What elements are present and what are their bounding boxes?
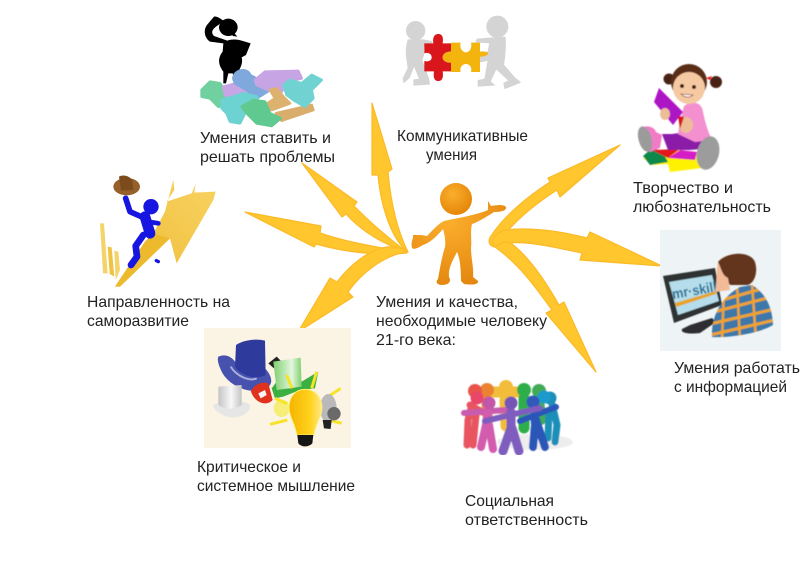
- arrow: to communication: [372, 103, 408, 252]
- label: information skills: [674, 360, 800, 396]
- label: critical thinking: Критическое и: [197, 459, 301, 476]
- label: self-development: Направленность на: [87, 294, 230, 311]
- arrow: to social responsibility: [495, 242, 596, 372]
- label: self-development: саморазвитие: [87, 313, 189, 330]
- panel: self-development: [87, 175, 230, 330]
- label: communication: [397, 128, 528, 164]
- icon: man at computer: [663, 254, 775, 340]
- background: man panel: [660, 230, 781, 351]
- label: creativity: Творчество и: [633, 180, 733, 197]
- label: communication: Коммуникативные: [397, 128, 528, 145]
- panel: social responsibility: [464, 380, 588, 529]
- label: social responsibility: ответственность: [465, 512, 588, 529]
- label: critical thinking: системное мышление: [197, 478, 355, 495]
- icon: man at computer: mr·skill: [671, 278, 718, 302]
- label: creativity: [633, 180, 771, 216]
- arrow: to problem solving: [302, 163, 407, 252]
- panel: problem solving: [200, 17, 335, 166]
- central caption: 21-го века:: [376, 332, 456, 349]
- central caption: Умения и качества,: [376, 294, 518, 311]
- arrow: to critical thinking: [298, 247, 407, 332]
- label: problem solving: решать проблемы: [200, 149, 335, 166]
- label: creativity: любознательность: [633, 199, 771, 216]
- central orange figure: [412, 183, 506, 285]
- panel: critical thinking: [197, 328, 355, 495]
- icon: climbing figure on arrow: [100, 175, 216, 287]
- background: hats panel: [204, 328, 351, 448]
- icon: circle of clay figures: [464, 380, 573, 451]
- central caption: необходимые человеку: [376, 313, 547, 330]
- icon: thinking hats and light bulb: [213, 340, 342, 446]
- icon: puzzled silhouette and puzzle pieces: [202, 17, 322, 126]
- icon: girl with paper: [635, 64, 723, 172]
- label: problem solving: Умения ставить и: [200, 130, 331, 147]
- panel: communication: [397, 16, 528, 164]
- central caption: [376, 294, 547, 349]
- label: communication: умения: [426, 147, 477, 164]
- label: critical thinking: [197, 459, 355, 495]
- label: information skills: Умения работать: [674, 360, 800, 377]
- panel: information skills: [660, 230, 800, 396]
- panel: creativity: [633, 64, 771, 216]
- arrow: to information skills: [492, 229, 662, 266]
- label: social responsibility: [465, 493, 588, 529]
- icon: two figures with puzzle: [403, 16, 520, 88]
- arrows radiating from central figure: [245, 103, 662, 372]
- label: problem solving: [200, 130, 335, 166]
- label: social responsibility: Социальная: [465, 493, 554, 510]
- label: information skills: с информацией: [674, 379, 787, 396]
- label: self-development: [88, 296, 230, 327]
- arrow: to creativity: [489, 145, 620, 247]
- arrow: to self-development: [245, 212, 407, 254]
